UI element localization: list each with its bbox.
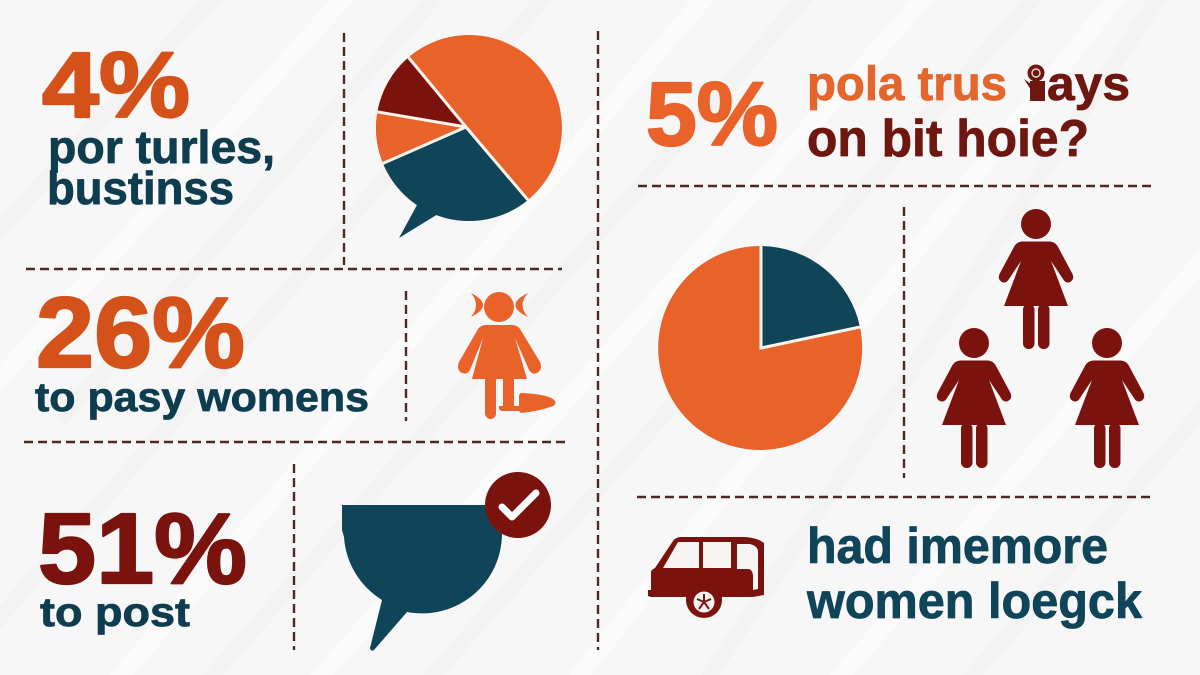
text: pola trus: pola trus xyxy=(807,58,1007,111)
icon: woman right xyxy=(1070,328,1144,468)
text: to pasy womens: to pasy womens xyxy=(35,374,369,420)
chart: large pie xyxy=(658,246,862,450)
text: had imemore women loegck: women loegck xyxy=(806,573,1142,629)
icon: small figure xyxy=(1024,64,1045,101)
text: to post: to post xyxy=(40,589,190,635)
text: on bit hoie?: on bit hoie? xyxy=(807,110,1089,168)
text: por turles, business: por turles, xyxy=(48,121,275,173)
chart: speech bubble pie xyxy=(376,35,562,238)
icon: woman left xyxy=(937,328,1011,468)
icon: girl with shoe xyxy=(458,292,556,419)
stat: 26%: 26% xyxy=(36,277,245,389)
text: had imemore women loegck xyxy=(806,518,1142,629)
panel: 5% stat xyxy=(646,58,1130,168)
text: por turles, business xyxy=(47,121,275,214)
text: ays: ays xyxy=(1047,58,1130,111)
icon: woman top xyxy=(999,209,1073,349)
panel: 51% stat xyxy=(38,472,551,651)
stat: 51%: 51% xyxy=(38,493,247,605)
stat: 5%: 5% xyxy=(646,65,778,165)
stat: 4%: 4% xyxy=(42,33,190,137)
icon: speech bubble xyxy=(342,505,502,651)
text: had imemore women loegck: had imemore xyxy=(807,518,1108,574)
panel: vehicle stat xyxy=(648,518,1142,629)
panel: 26% stat xyxy=(35,277,556,420)
text: por turles, business: bustinss xyxy=(47,162,234,214)
icon: three women xyxy=(937,209,1144,468)
panel: 4% business stat xyxy=(42,33,562,238)
icon: check badge xyxy=(485,472,551,538)
icon: bus xyxy=(648,537,764,618)
